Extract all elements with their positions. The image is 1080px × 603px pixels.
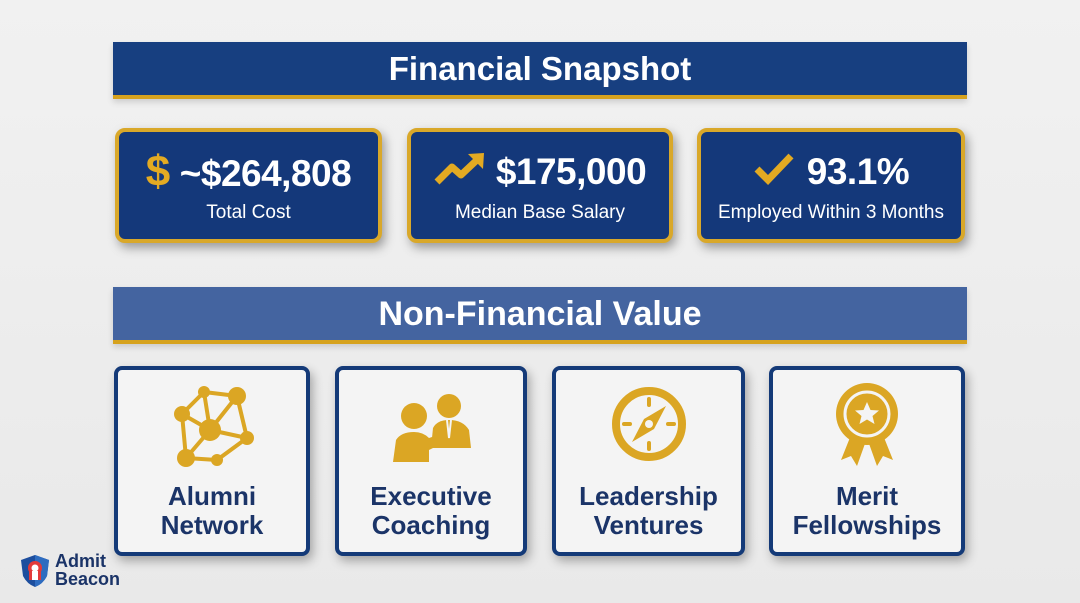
card: employment bbox=[697, 128, 965, 243]
icon: award ribbon bbox=[836, 383, 898, 466]
label: merit fellowships: Merit bbox=[836, 481, 898, 511]
label: merit fellowships bbox=[793, 481, 941, 540]
label: leadership ventures bbox=[579, 481, 718, 540]
card: median salary bbox=[407, 128, 673, 243]
card: total cost bbox=[115, 128, 382, 243]
caption: median salary: Median Base Salary bbox=[455, 202, 625, 223]
banner: Non-Financial Value bbox=[113, 287, 967, 344]
banner: Financial Snapshot: Financial Snapshot bbox=[389, 50, 691, 87]
value: employment bbox=[754, 151, 909, 192]
banner: Financial Snapshot bbox=[113, 42, 967, 99]
logo: Admit Beacon bbox=[21, 551, 120, 589]
label: alumni network bbox=[161, 481, 264, 540]
tile: executive coaching bbox=[335, 366, 527, 556]
banner: Non-Financial Value: Non-Financial Value bbox=[378, 295, 702, 333]
label: merit fellowships: Fellowships bbox=[793, 510, 941, 540]
icon: shield bbox=[21, 555, 49, 587]
label: leadership ventures: Leadership bbox=[579, 481, 718, 511]
text: brand name: Beacon bbox=[55, 569, 120, 589]
label: executive coaching: Coaching bbox=[372, 510, 490, 540]
caption: employment: Employed Within 3 Months bbox=[718, 202, 944, 223]
label: executive coaching: Executive bbox=[370, 481, 492, 511]
text: brand name: Admit bbox=[55, 551, 106, 571]
tile: leadership ventures bbox=[552, 366, 745, 556]
caption: total cost: Total Cost bbox=[206, 202, 291, 223]
label: leadership ventures: Ventures bbox=[594, 510, 703, 540]
label: executive coaching bbox=[370, 481, 492, 540]
value: median salary: $175,000 bbox=[496, 151, 646, 192]
value: total cost: $ ~$264,808 bbox=[146, 147, 351, 196]
icon: coaching people bbox=[393, 394, 471, 462]
icon: compass bbox=[612, 387, 686, 461]
tile: alumni network bbox=[114, 366, 310, 556]
icon: network bbox=[174, 386, 254, 467]
text: brand name bbox=[55, 551, 120, 589]
label: alumni network: Network bbox=[161, 510, 263, 540]
value: employment: 93.1% bbox=[807, 151, 909, 192]
label: alumni network: Alumni bbox=[168, 481, 256, 511]
tile: merit fellowships bbox=[769, 366, 965, 556]
